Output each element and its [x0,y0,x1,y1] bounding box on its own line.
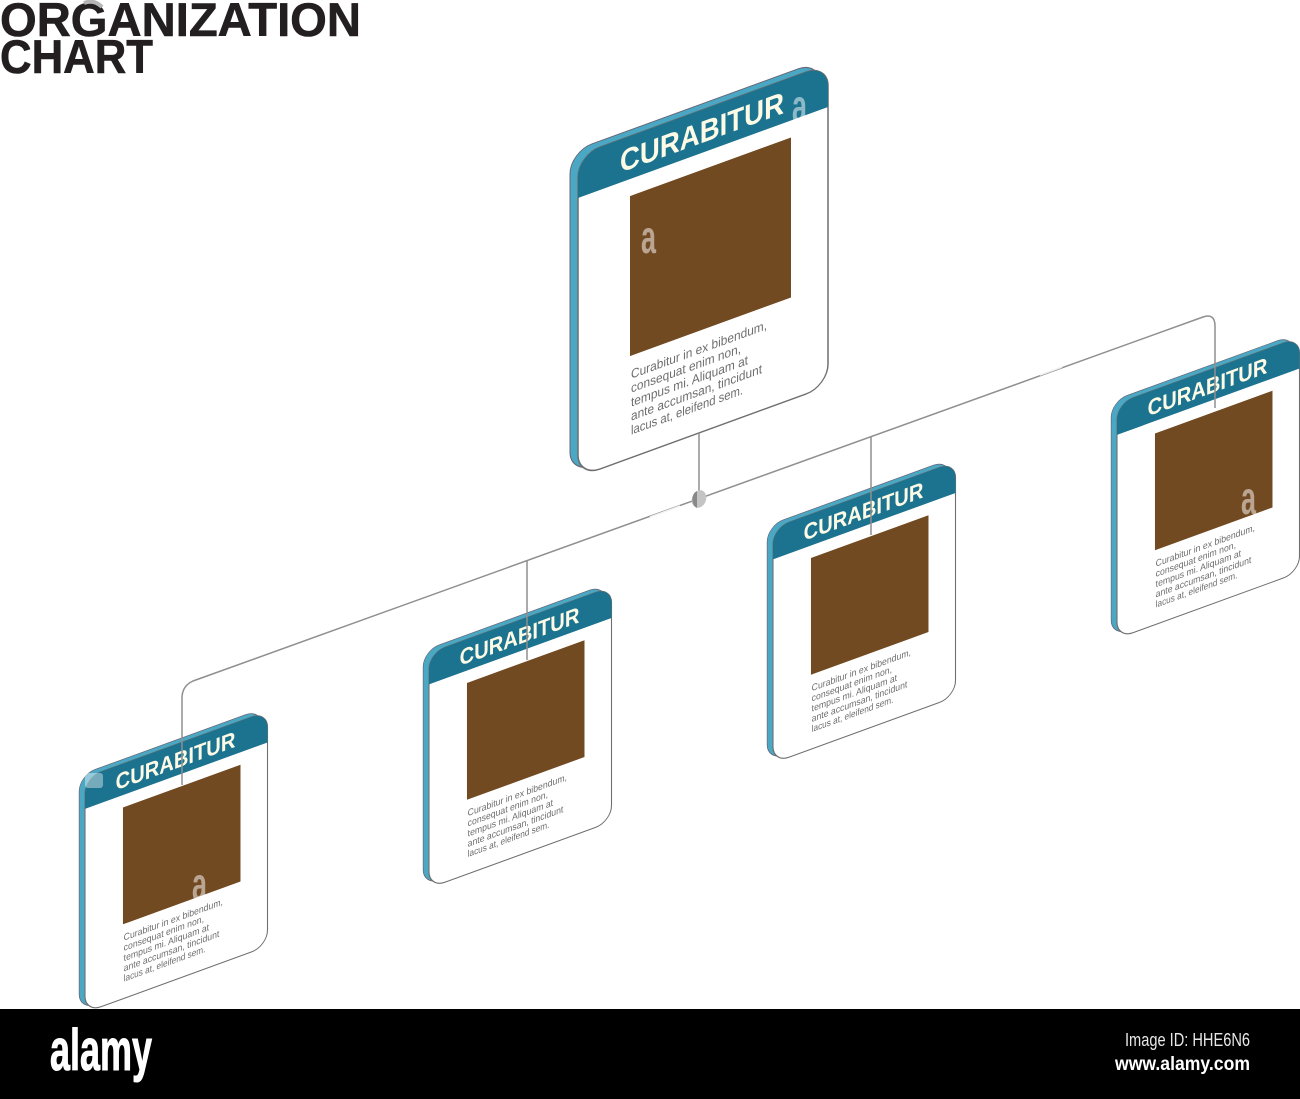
connector lines [182,316,1215,785]
card heading: CURABITUR [460,602,579,671]
card image placeholder [1155,391,1272,550]
card body text: ante accumsan, tincidunt [812,679,908,725]
card body text: Curabitur in ex bibendum, [124,897,223,944]
card heading: CURABITUR [804,477,923,546]
card body text: consequat enim non, [812,665,892,704]
card body text [124,897,223,985]
watermark letters: a [792,80,807,132]
panel: card 3 [767,457,956,765]
card side edge [79,709,262,1010]
title: CHART [0,30,153,83]
card heading: CURABITUR [620,85,784,179]
title [0,0,361,83]
footer website: www.alamy.com [1114,1054,1250,1075]
watermark letters: a [641,211,656,263]
card body text: tempus mi. Aliquam at [812,673,897,715]
card body text: Curabitur in ex bibendum, [812,647,911,694]
card side edge [1111,335,1294,636]
panel: top card [570,58,828,480]
card face [429,587,612,888]
card body text: consequat enim non, [124,914,204,954]
card body text [631,318,767,438]
card body text: consequat enim non, [1156,540,1236,580]
card image placeholder [123,765,240,924]
card body text: lacus at, eleifend sem. [812,695,893,735]
footer bar [0,1009,1300,1099]
card body text [468,772,567,860]
card body text: ante accumsan, tincidunt [1156,555,1252,600]
card body text [812,647,911,735]
card body text: Curabitur in ex bibendum, [631,318,767,382]
watermark box on card 1 header [85,773,103,788]
card body text: ante accumsan, tincidunt [124,929,220,974]
card body text: tempus mi. Aliquam at [124,922,209,964]
card body text: consequat enim non, [468,790,548,829]
card header band [85,711,268,809]
card side edge [767,459,950,761]
card face [85,711,268,1013]
card header band [429,587,612,684]
card image placeholder [811,515,928,675]
card body text: tempus mi. Aliquam at [1156,548,1241,590]
card heading: CURABITUR [1148,352,1267,421]
card header band [578,64,828,198]
card image placeholder [630,137,791,356]
card heading: CURABITUR [116,726,235,795]
card body text: ante accumsan, tincidunt [468,804,564,850]
card body text: ante accumsan, tincidunt [631,361,762,424]
card body text: lacus at, eleifend sem. [631,382,743,438]
card body text: lacus at, eleifend sem. [1156,570,1237,611]
footer logo: alamy [50,1018,152,1083]
card header band [1117,337,1300,435]
card body text: lacus at, eleifend sem. [468,820,549,860]
card header band [773,462,956,559]
card side edge [570,61,820,474]
footer image id: Image ID: HHE6N6 [1125,1030,1250,1050]
connector node [689,488,709,510]
card body text: consequat enim non, [631,341,741,396]
card face [1117,337,1300,639]
card body text [1156,523,1255,611]
card image placeholder [467,640,584,800]
card side edge [423,584,606,886]
card body text: tempus mi. Aliquam at [468,798,553,840]
card body text: tempus mi. Aliquam at [631,352,748,410]
card body text: lacus at, eleifend sem. [124,944,205,985]
panel: card 4 [1111,333,1300,641]
card body text: Curabitur in ex bibendum, [1156,523,1255,570]
watermark arc on title [84,2,102,7]
card body text: Curabitur in ex bibendum, [468,772,567,819]
panel: card 2 [423,582,612,890]
card face [578,64,828,477]
card face [773,462,956,763]
panel: card 1 [79,707,268,1015]
watermark letters: a [192,858,207,910]
watermark letters [192,80,1256,910]
watermark letters: a [1241,472,1256,524]
